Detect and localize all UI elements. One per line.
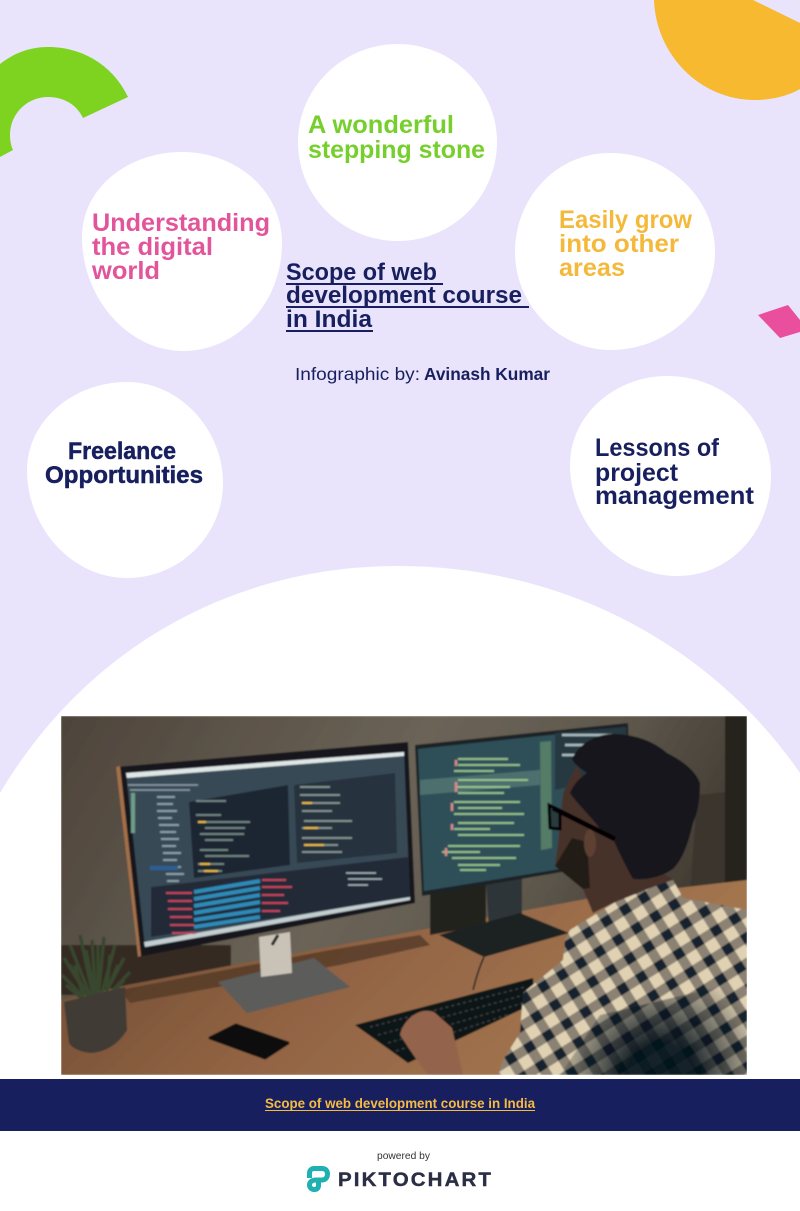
footer link text: Scope of web development course in India (265, 1095, 535, 1111)
white arch background (0, 566, 800, 1080)
heading: scope of web development course (286, 259, 529, 333)
byline: Avinash Kumar (424, 364, 550, 384)
plant (62, 935, 130, 1053)
left monitor (116, 742, 415, 957)
text: understanding the digital world: the digital (92, 233, 213, 261)
desk (61, 880, 747, 1075)
byline: Infographic by: (295, 364, 420, 384)
phone (210, 1025, 288, 1058)
hand (400, 1011, 463, 1075)
shirt (498, 880, 747, 1075)
text: lessons of project management: management (595, 482, 755, 510)
powered by label: powered by (377, 1150, 431, 1162)
piktochart logo (310, 1168, 493, 1191)
decorative yellow semicircle (654, 0, 800, 100)
text: easily grow into other areas (559, 206, 693, 282)
wall (61, 716, 726, 1001)
text: understanding the digital world: Understanding (92, 209, 270, 237)
icon: piktochart mark (310, 1168, 328, 1190)
decorative green arc (0, 47, 128, 157)
beard (555, 838, 590, 889)
footer white strip (0, 1131, 800, 1211)
text: a wonderful stepping stone (308, 111, 485, 164)
text: understanding the digital world: world (91, 257, 160, 285)
bubble: easily grow into other areas (515, 153, 715, 350)
text: lessons of project management: project (595, 459, 679, 487)
keyboard (355, 978, 535, 1063)
wordmark: PIKTOCHART (338, 1169, 493, 1191)
bubble: a wonderful stepping stone (298, 44, 497, 241)
heading: scope of web development course: development course (286, 282, 522, 309)
text: easily grow into other areas: areas (559, 254, 625, 282)
cable (473, 957, 484, 990)
glasses (549, 805, 560, 829)
byline (295, 364, 550, 384)
text: freelance opportunities: Freelance (68, 438, 176, 465)
text: a wonderful stepping stone: stepping stone (308, 136, 485, 164)
text: lessons of project management (595, 434, 755, 510)
left monitor stand (218, 932, 350, 1013)
text: freelance opportunities: Opportunities (45, 462, 203, 489)
man's head (549, 734, 700, 913)
hair (570, 734, 700, 879)
ear (584, 829, 596, 857)
text: freelance opportunities (45, 438, 203, 489)
bubble: lessons of project management (570, 376, 771, 576)
text: easily grow into other areas: into other (559, 230, 679, 258)
decorative pink diamond (758, 305, 800, 338)
right monitor (415, 723, 632, 896)
text: a wonderful stepping stone: A wonderful (308, 111, 454, 139)
text: lessons of project management: Lessons of (595, 434, 720, 462)
photo: developer working at two monitors (61, 716, 747, 1075)
heading: scope of web development course: in India (286, 306, 372, 333)
bubble: freelance opportunities (27, 382, 223, 578)
text: easily grow into other areas: Easily grow (559, 206, 693, 234)
heading: scope of web development course: Scope of web (286, 259, 437, 286)
text: understanding the digital world (91, 209, 270, 285)
right monitor stand (430, 878, 569, 957)
footer bar (0, 1079, 800, 1131)
neck and face (555, 765, 673, 913)
bubble: understanding the digital world (82, 152, 282, 351)
